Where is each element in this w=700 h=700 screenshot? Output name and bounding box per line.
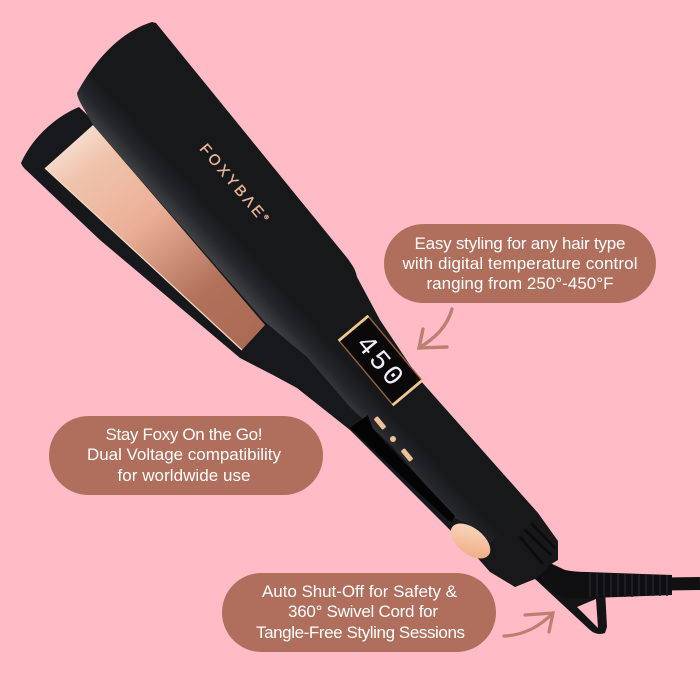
callout: temperature control (384, 224, 656, 303)
temperature readout: 450 (348, 330, 410, 396)
callout: auto shut-off (222, 573, 496, 652)
swivel stand (535, 579, 607, 634)
callout: auto shut-off: Tangle-Free Styling Sessions (256, 623, 465, 642)
brand logo: ® (262, 213, 271, 222)
grip collar (475, 513, 558, 587)
callout: dual voltage (49, 416, 323, 495)
plate edge highlight (45, 168, 242, 350)
callout: dual voltage: Dual Voltage compatibility (87, 445, 282, 464)
callout: temperature control: with digital temperature control (402, 254, 638, 273)
collar ribs (520, 523, 555, 564)
display bezel (339, 316, 422, 405)
arrow to display (419, 309, 452, 348)
callout: temperature control: ranging from 250°-450°F (426, 274, 614, 293)
brand logo: FOXYBΛE (196, 141, 269, 223)
arrow to swivel cord (504, 613, 553, 636)
callout: dual voltage: for worldwide use (118, 466, 250, 485)
cord strain relief (535, 562, 672, 598)
callout: auto shut-off: Auto Shut-Off for Safety & (262, 582, 458, 601)
bezel gold ends (339, 316, 422, 405)
black slit (350, 415, 455, 523)
upper arm and handle (77, 22, 538, 555)
power knob (444, 517, 497, 565)
callout: auto shut-off: 360° Swivel Cord for (288, 602, 438, 621)
callout: dual voltage: Stay Foxy On the Go! (106, 425, 262, 444)
power cord (665, 577, 700, 590)
control buttons (374, 416, 413, 462)
rose gold plate (45, 125, 265, 350)
callout: temperature control: Easy styling for any hair type (414, 234, 626, 253)
lower arm (21, 107, 548, 587)
